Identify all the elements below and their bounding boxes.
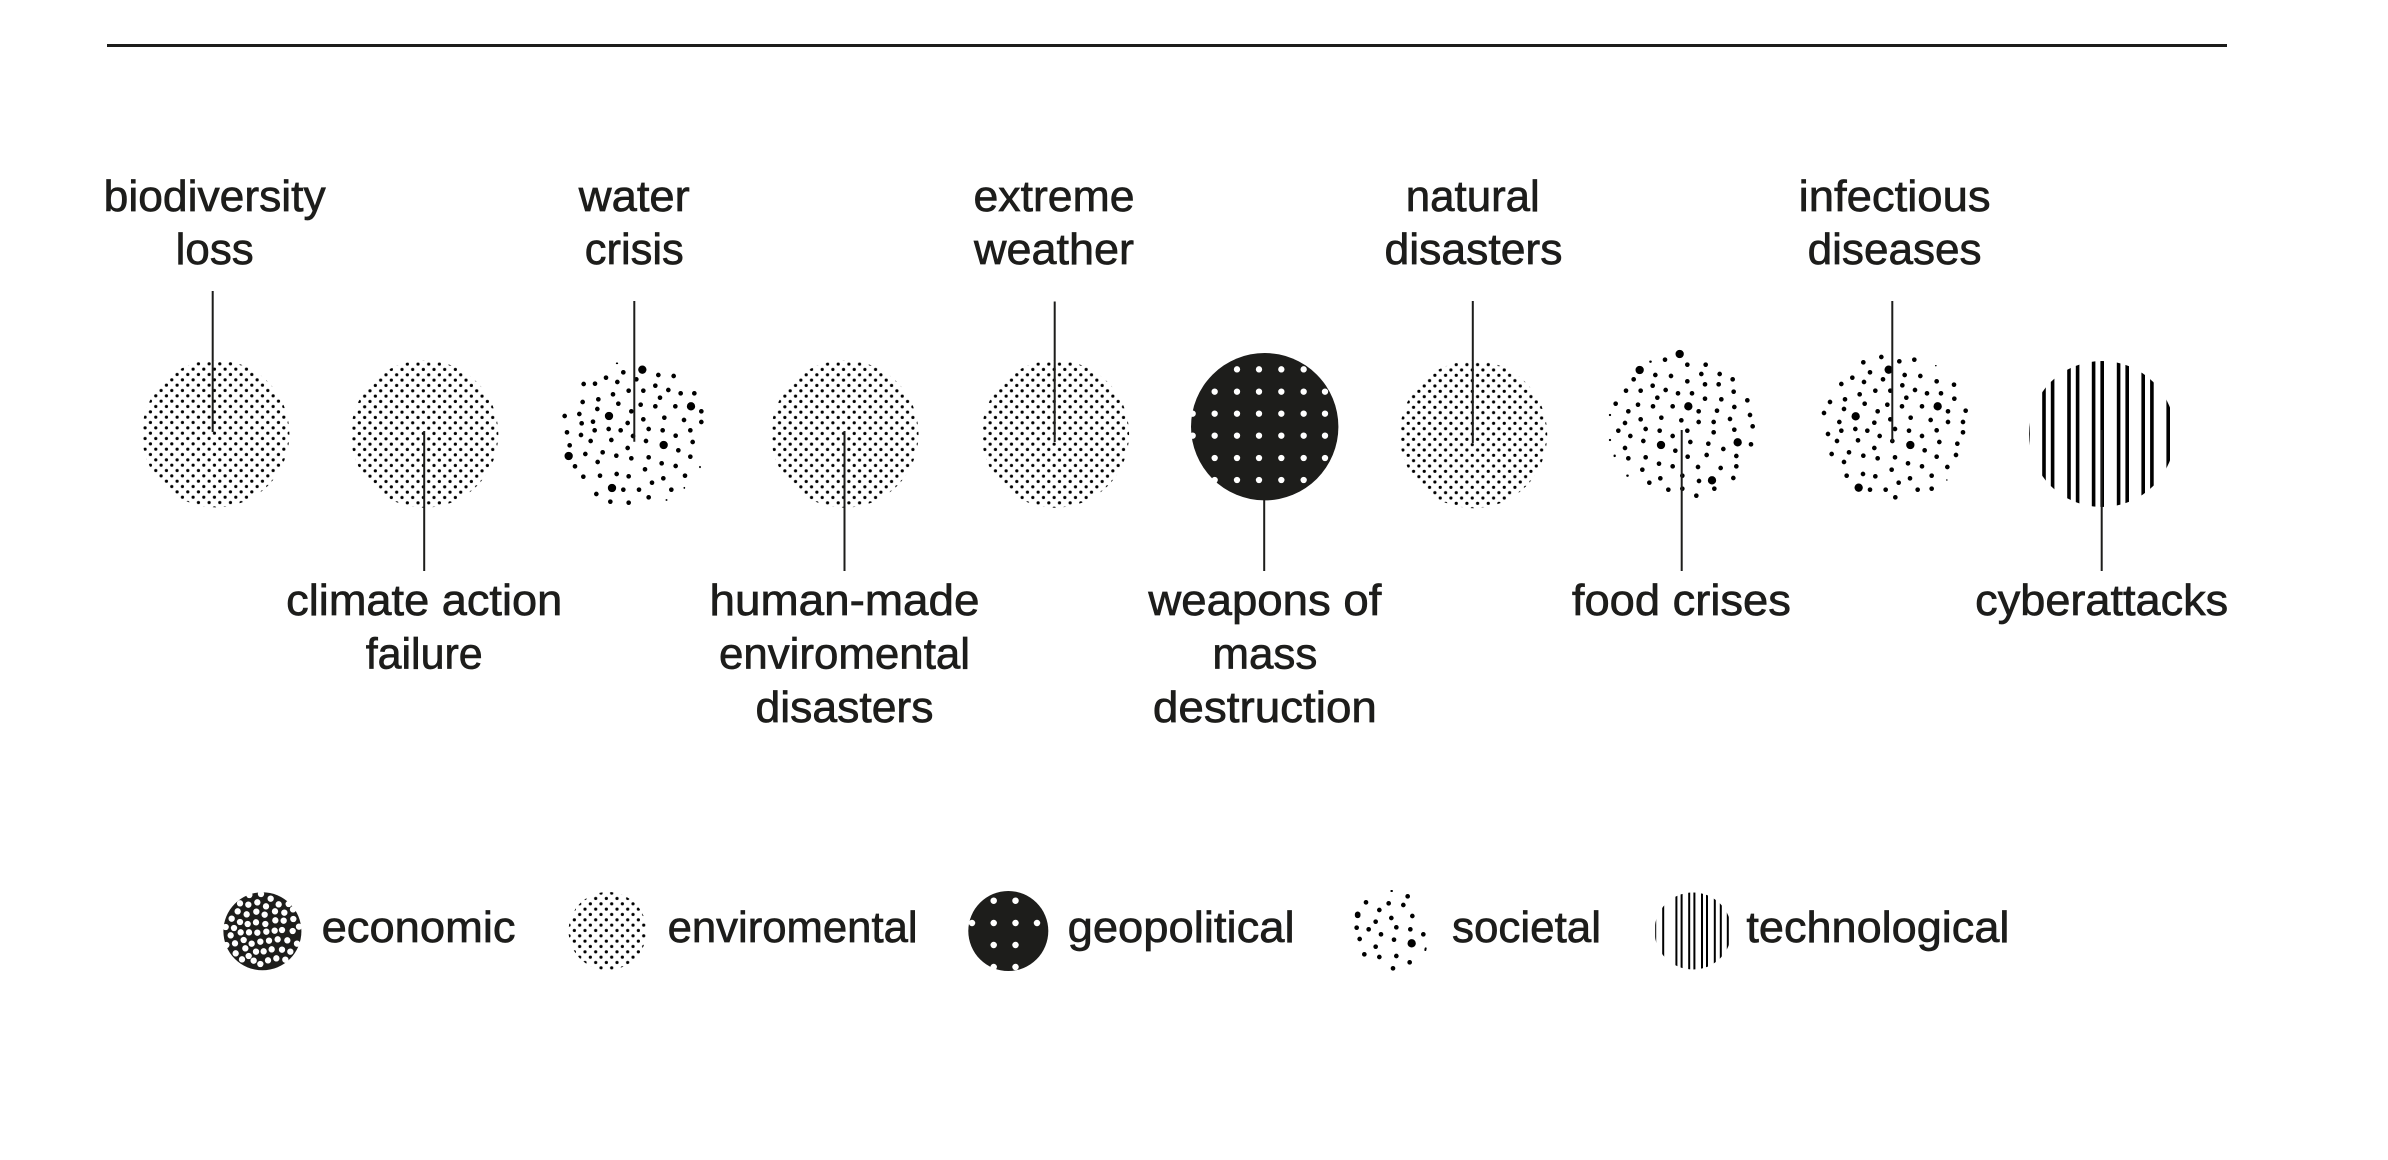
icon: societal pattern [1357,891,1426,968]
legend item: enviromental [569,892,918,970]
risk: human-made environmental disasters [710,360,980,732]
risk: biodiversity loss [104,173,326,507]
label: human-made enviromental disasters [710,577,980,732]
risk: weapons of mass destruction [1147,353,1382,732]
label: food crises: food crises [1572,577,1791,625]
pattern circle: technological [2028,360,2170,508]
label: extreme weather: extreme [974,173,1134,221]
icon: geopolitical pattern [968,891,1048,971]
leader line [212,291,214,432]
leader line [1472,301,1474,443]
legend label: societal: societal [1452,904,1601,952]
leader line [423,431,425,571]
label: infectious diseases: infectious [1799,173,1991,221]
legend label: economic: economic [322,904,516,952]
label: weapons of mass destruction: mass [1212,630,1317,678]
label: cyberattacks: cyberattacks [1975,577,2228,625]
label: weapons of mass destruction: weapons of [1147,577,1382,625]
legend item: economic [223,892,516,970]
pattern circle: environmental [351,360,498,508]
legend item: societal [1357,891,1601,968]
risk: natural disasters [1384,173,1562,508]
risk: cyberattacks [1975,360,2228,625]
leader line [844,431,846,571]
pattern circle: societal [1824,357,1966,497]
leader line [633,301,635,442]
chart: ten global risks [104,173,2228,732]
label: water crisis [578,173,690,274]
label: natural disasters: natural [1406,173,1540,221]
pattern circle: environmental [771,360,918,508]
label: climate action failure: climate action [286,577,562,625]
label: natural disasters: disasters [1384,226,1562,274]
label: human-made enviromental disasters: human-made [710,577,980,625]
label: extreme weather: weather [973,226,1134,274]
risk: food crises [1572,354,1791,625]
legend [223,890,2009,972]
icon: technological pattern [1655,890,1729,972]
risk: infectious diseases [1799,173,1991,497]
pattern circle: environmental [142,360,289,507]
pattern circle: societal [1610,354,1753,496]
label: weapons of mass destruction [1147,577,1382,732]
label: human-made enviromental disasters: disasters [756,684,934,732]
leader line [1054,302,1056,442]
leader line [1263,500,1265,571]
legend label: geopolitical: geopolitical [1068,904,1295,952]
icon: economic pattern [223,892,301,970]
leader line [2101,430,2103,571]
label: climate action failure: failure [366,630,483,678]
label: biodiversity loss [104,173,326,274]
legend item: technological [1655,890,2009,972]
label: biodiversity loss: loss [176,226,254,274]
label: human-made enviromental disasters: enviromental [719,630,970,678]
label: infectious diseases [1799,173,1991,274]
risk: water crisis [565,173,701,503]
label: water crisis: crisis [585,226,684,274]
leader line [1681,430,1683,571]
leader line [1891,301,1893,442]
label: biodiversity loss: biodiversity [104,173,326,221]
label: climate action failure [286,577,562,678]
icon: enviromental pattern [569,892,647,970]
legend label: technological: technological [1746,904,2009,952]
risk: extreme weather [973,173,1134,508]
label: natural disasters [1384,173,1562,274]
label: weapons of mass destruction: destruction [1153,684,1377,732]
pattern circle: societal [565,363,701,503]
legend item: geopolitical [968,891,1295,971]
pattern circle: environmental [982,360,1129,508]
pattern circle: environmental [1400,361,1547,508]
risk: climate action failure [286,360,562,678]
label: infectious diseases: diseases [1808,226,1982,274]
label: extreme weather [973,173,1134,274]
label: water crisis: water [578,173,690,221]
legend label: enviromental: enviromental [668,904,918,952]
pattern circle: geopolitical [1191,353,1338,500]
